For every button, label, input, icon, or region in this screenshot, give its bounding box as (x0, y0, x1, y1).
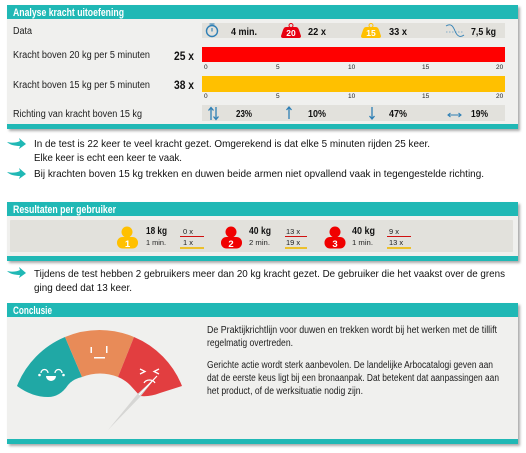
user 1: 0 x (183, 227, 193, 236)
bar chart: kracht boven 20 kg: 0 (204, 64, 208, 71)
face: distressed (140, 369, 159, 383)
bar chart: kracht boven 15 kg: 38 x (174, 78, 194, 92)
user 2: 13 x (286, 227, 300, 236)
user 1: 1 x (183, 238, 193, 247)
bar chart: kracht boven 20 kg: 10 (348, 64, 356, 71)
panel: resultaten per gebruiker (7, 202, 520, 263)
icon: arrow bullet 3 (7, 267, 26, 278)
heading: resultaten: Resultaten per gebruiker (13, 204, 117, 216)
user 3: 40 kg (352, 226, 375, 237)
gauge segment: red (118, 337, 182, 396)
face: happy (38, 370, 65, 381)
bar chart: kracht boven 20 kg: 5 (276, 64, 280, 71)
text block: conclusie tekst: het product, of de werksituatie nodig zijn. (207, 386, 363, 397)
user 2: 40 kg (249, 226, 271, 237)
bar chart: kracht boven 20 kg: 20 (496, 64, 504, 71)
bar chart: kracht boven 15 kg: 0 (204, 93, 208, 100)
bar chart: kracht boven 15 kg: 10 (348, 93, 356, 100)
user 3: 3 (332, 239, 338, 250)
face: neutral (90, 346, 108, 358)
user 1 (117, 226, 204, 250)
gauge segment: orange (65, 330, 134, 377)
user 1: 1 min. (146, 238, 166, 247)
user 1: 18 kg (146, 226, 167, 237)
gauge needle (108, 376, 157, 430)
icon: arrow down (370, 107, 374, 119)
icon: arrow bullet 1 (7, 138, 26, 149)
data strip: 4 min. (231, 27, 257, 38)
bar chart: kracht boven 20 kg: 25 x (174, 49, 194, 63)
bar chart: kracht boven 20 kg (174, 47, 505, 71)
user 3: 13 x (389, 238, 403, 247)
user 2 (221, 226, 307, 250)
text block: bevindingen kracht (7, 138, 484, 180)
text block: bevindingen kracht: Bij krachten boven 15 kg trekken en duwen beide armen niet opvallend vaak in tegengestelde richting. (34, 168, 484, 180)
user 1: 1 (125, 239, 131, 250)
row labels: Data (13, 26, 32, 37)
user 3: 9 x (389, 227, 399, 236)
bar chart: kracht boven 15 kg (174, 76, 505, 100)
panel: analyse kracht uitoefening (7, 5, 520, 131)
direction strip: 47% (389, 109, 407, 120)
row labels: Kracht boven 20 kg per 5 minuten (13, 50, 150, 61)
direction strip: 23% (236, 109, 252, 120)
icon: red weight 20: 20 (286, 28, 296, 38)
heading: analyse: Analyse kracht uitoefening (13, 7, 124, 19)
data strip (202, 23, 505, 38)
data strip: 7,5 kg (471, 27, 496, 38)
text block: resultaat gebruikers: Tijdens de test hebben 2 gebruikers meer dan 20 kg kracht gezet. De gebruiker die het vaakst over de grens (34, 268, 505, 280)
icon: yellow weight 15: 15 (366, 28, 376, 38)
icon: red weight 20 (281, 24, 301, 38)
icon: arrow bullet 2 (7, 168, 26, 179)
icon: up and down arrows (208, 107, 218, 120)
icon: yellow weight 15 (361, 24, 381, 38)
text block: conclusie tekst (207, 325, 499, 397)
bar chart: kracht boven 15 kg: 5 (276, 93, 280, 100)
data strip: 33 x (389, 27, 407, 38)
user 2: 19 x (286, 238, 300, 247)
icon: wave (446, 25, 464, 36)
direction strip: 10% (308, 109, 326, 120)
gauge segment: teal (17, 337, 82, 397)
user 2: 2 (228, 239, 234, 250)
data strip: 22 x (308, 27, 326, 38)
text block: bevindingen kracht: In de test is 22 keer te veel kracht gezet. Omgerekend is dat elke 5 minuten rijden 25 keer. (34, 138, 430, 150)
gauge (17, 330, 182, 430)
row labels (13, 26, 150, 120)
direction strip (202, 105, 505, 121)
user 2: 2 min. (249, 238, 270, 247)
icon: stopwatch (206, 24, 218, 36)
icon: arrow up (286, 107, 292, 119)
icon: left and right arrow (448, 113, 461, 117)
text block: resultaat gebruikers (7, 267, 505, 294)
row labels: Kracht boven 15 kg per 5 minuten (13, 80, 150, 91)
text block: conclusie tekst: De Praktijkrichtlijn voor duwen en trekken wordt bij het werken met de tillift (207, 325, 497, 336)
bar chart: kracht boven 20 kg: 15 (422, 64, 430, 71)
bar chart: kracht boven 15 kg: 15 (422, 93, 430, 100)
text block: resultaat gebruikers: ging deed dat 13 keer. (34, 282, 132, 294)
bar chart: kracht boven 15 kg: 20 (496, 93, 504, 100)
row labels: Richting van kracht boven 15 kg (13, 109, 142, 120)
panel: conclusie (7, 303, 520, 446)
text block: bevindingen kracht: Elke keer is echt een keer te vaak. (34, 152, 182, 164)
user 3: 1 min. (352, 238, 373, 247)
heading: conclusie: Conclusie (13, 305, 52, 317)
text block: conclusie tekst: regelmatig overtreden. (207, 338, 293, 349)
user 3 (324, 226, 411, 250)
direction strip: 19% (471, 109, 488, 120)
